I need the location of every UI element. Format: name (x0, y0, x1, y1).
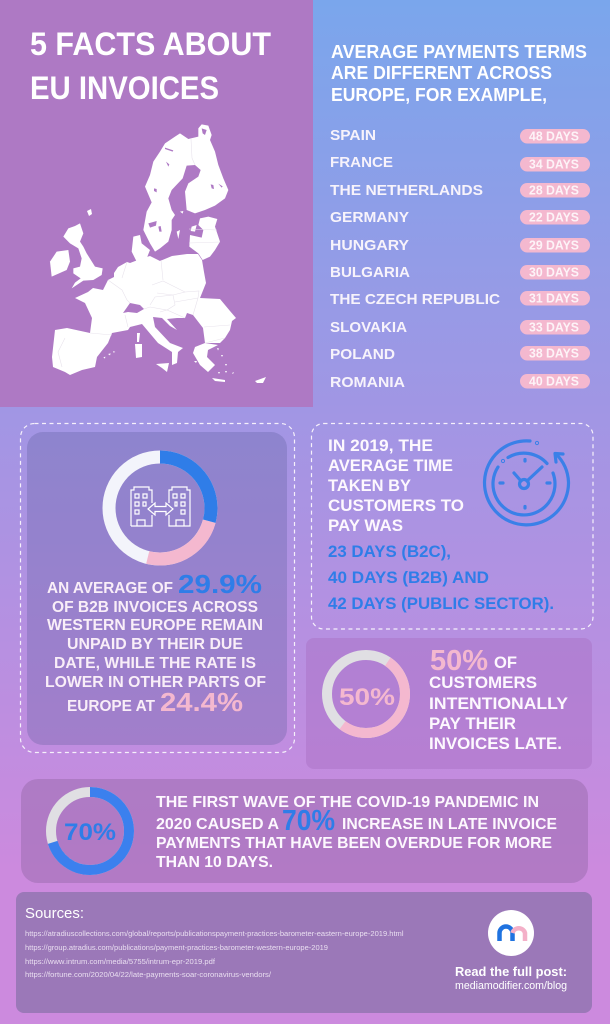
logo: Mediamodifier (488, 910, 534, 956)
source links: https://atradiuscollections.com/global/reports/publicationspayment-practices-barometer-eastern-europe-2019.html (25, 931, 404, 938)
text: customers intentionally pay late: INVOICES LATE. (429, 735, 562, 753)
country list: GERMANY (330, 209, 409, 226)
text: days by sector (328, 543, 554, 613)
country list: THE CZECH REPUBLIC (330, 291, 500, 308)
heading: average payment terms: EUROPE, FOR EXAMPLE, (331, 85, 547, 105)
panel: B2B unpaid invoices (20, 424, 294, 752)
text: B2B invoices statistic (45, 569, 266, 717)
text: COVID-19 statistic: PAYMENTS THAT HAVE BEEN OVERDUE FOR MORE (156, 835, 552, 852)
panel: title and map (0, 0, 313, 407)
title: EU INVOICES (30, 70, 219, 106)
text: average time taken: TAKEN BY (328, 477, 411, 495)
day pills: 40 DAYS (529, 374, 579, 388)
heading: average payment terms (331, 42, 587, 105)
icon: clock with circular arrow (485, 441, 569, 525)
call to action: read the full post: mediamodifier.com/blog (455, 980, 567, 992)
day pills: 22 DAYS (529, 210, 579, 224)
Switzerland cut-out (123, 303, 144, 313)
donut chart: 70 percent (51, 792, 129, 870)
call to action: read the full post (455, 965, 567, 992)
country list: POLAND (330, 346, 395, 363)
source links: https://www.intrum.com/media/5755/intrum-epr-2019.pdf (25, 959, 215, 966)
donut chart: 29.9 and 24.4 percent (109, 457, 211, 559)
day pills: 33 DAYS (529, 320, 579, 334)
title (30, 26, 271, 106)
day pills: 28 DAYS (529, 184, 579, 198)
text: COVID-19 statistic: THAN 10 DAYS. (156, 854, 273, 871)
text: average time taken: PAY WAS (328, 517, 403, 535)
panel: COVID-19 late payments (21, 779, 588, 883)
panel: average time to pay (312, 424, 593, 629)
text: average time taken (328, 437, 464, 535)
text: B2B invoices statistic: 24.4% (160, 687, 243, 717)
day pills: 31 DAYS (529, 292, 579, 306)
text: B2B invoices statistic: OF B2B INVOICES ACROSS (52, 599, 258, 616)
text: customers intentionally pay late: OF (494, 654, 517, 672)
text: B2B invoices statistic: EUROPE AT (67, 698, 155, 715)
text: COVID-19 statistic (156, 794, 557, 871)
day pills: 29 DAYS (529, 238, 579, 252)
day pills: 38 DAYS (529, 346, 579, 360)
text: B2B invoices statistic: AN AVERAGE OF (47, 580, 173, 597)
day pills: 30 DAYS (529, 266, 579, 280)
donut chart: 50 percent (327, 655, 405, 733)
text: customers intentionally pay late: PAY THEIR (429, 715, 516, 733)
country list: ROMANIA (330, 374, 405, 391)
icon: two buildings with double arrow (131, 487, 190, 526)
text: B2B invoices statistic: 29.9% (178, 569, 262, 599)
panel: sources (16, 892, 592, 1013)
title: 5 FACTS ABOUT (30, 26, 271, 62)
day pills (520, 129, 590, 388)
text: days by sector: 23 DAYS (B2C), (328, 543, 451, 561)
text: customers intentionally pay late: INTENTIONALLY (429, 695, 568, 713)
text: COVID-19 statistic: 2020 CAUSED A (156, 816, 279, 833)
text: average time taken: CUSTOMERS TO (328, 497, 464, 515)
label: 70 percent: 70% (64, 819, 116, 846)
panel: customers paying late (306, 638, 592, 769)
text: B2B invoices statistic: WESTERN EUROPE REMAIN (47, 617, 263, 634)
country list: THE NETHERLANDS (330, 182, 483, 199)
country list: BULGARIA (330, 264, 410, 281)
heading: sources: Sources: (25, 905, 84, 922)
text: customers intentionally pay late: 50% (430, 645, 488, 677)
text: customers intentionally pay late (429, 645, 568, 753)
country list: HUNGARY (330, 237, 409, 254)
text: COVID-19 statistic: THE FIRST WAVE OF THE COVID-19 PANDEMIC IN (156, 794, 539, 811)
text: days by sector: 42 DAYS (PUBLIC SECTOR). (328, 595, 554, 613)
map of the European Union (50, 124, 266, 383)
source links: https://fortune.com/2020/04/22/late-payments-soar-coronavirus-vendors/ (25, 972, 271, 979)
country list: FRANCE (330, 154, 393, 171)
panel: average payment terms (330, 42, 590, 391)
day pills: 34 DAYS (529, 158, 579, 172)
country list: SLOVAKIA (330, 319, 407, 336)
source links (25, 931, 404, 979)
heading: average payment terms: AVERAGE PAYMENTS TERMS (331, 42, 587, 62)
heading: average payment terms: ARE DIFFERENT ACROSS (331, 63, 552, 83)
text: average time taken: AVERAGE TIME (328, 457, 453, 475)
source links: https://group.atradius.com/publications/payment-practices-barometer-western-europe-2019 (25, 945, 328, 952)
text: days by sector: 40 DAYS (B2B) AND (328, 569, 489, 587)
text: customers intentionally pay late: CUSTOMERS (429, 674, 537, 692)
text: average time taken: IN 2019, THE (328, 437, 433, 455)
country list (330, 127, 500, 391)
day pills: 48 DAYS (529, 130, 579, 144)
country list: SPAIN (330, 127, 376, 144)
text: B2B invoices statistic: DATE, WHILE THE RATE IS (54, 655, 256, 672)
text: B2B invoices statistic: UNPAID BY THEIR DUE (67, 636, 243, 653)
text: COVID-19 statistic: INCREASE IN LATE INVOICE (342, 816, 557, 833)
text: COVID-19 statistic: 70% (282, 805, 335, 837)
label: 50 percent: 50% (339, 684, 395, 711)
text: B2B invoices statistic: LOWER IN OTHER PARTS OF (45, 674, 266, 691)
call to action: read the full post: Read the full post: (455, 965, 567, 979)
